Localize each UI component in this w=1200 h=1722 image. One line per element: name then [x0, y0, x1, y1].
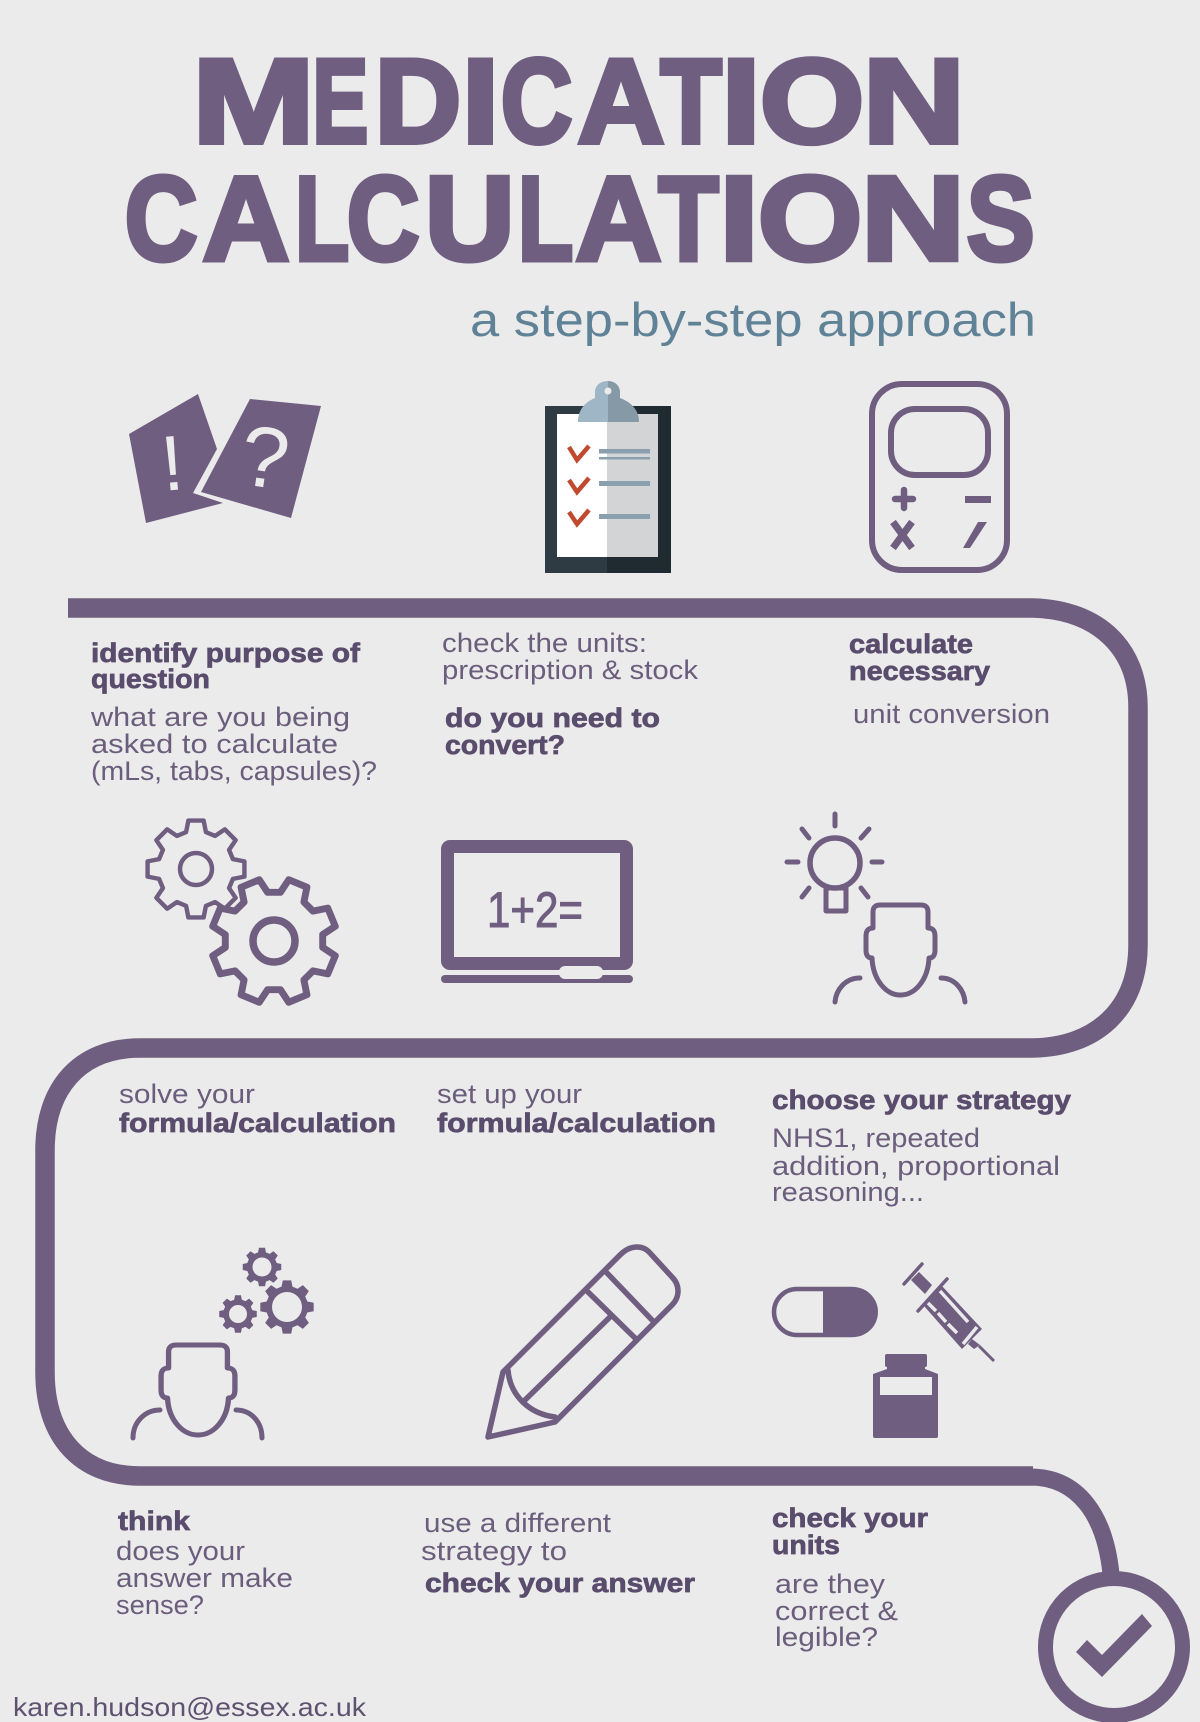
step: calculate necessary: calculate — [849, 629, 973, 659]
title: A — [202, 152, 290, 286]
step: choose strategy: addition, proportional — [772, 1151, 1060, 1181]
step: use a different strategy: strategy to — [421, 1536, 567, 1566]
step: choose strategy — [772, 1085, 1071, 1207]
title — [125, 34, 1035, 286]
step: calculate necessary: necessary — [849, 656, 990, 686]
step: set up: formula/calculation — [437, 1108, 716, 1138]
title: I — [719, 152, 759, 286]
title: U — [425, 152, 515, 286]
icon: person thinking with gears — [133, 1248, 314, 1438]
icon: exclamation and question cards: ? — [234, 407, 295, 509]
title: M — [192, 34, 314, 168]
icon: finish check mark — [1046, 1578, 1182, 1716]
title: A — [576, 152, 662, 286]
step: calculate necessary — [849, 629, 1050, 729]
title: E — [312, 34, 368, 168]
title: I — [462, 34, 499, 168]
icon: exclamation and question cards: ! — [157, 418, 187, 508]
step: use a different strategy: use a different — [424, 1508, 612, 1538]
title: L — [295, 152, 349, 286]
step: identify purpose: identify purpose of — [91, 638, 361, 668]
step: think: answer make — [116, 1563, 293, 1593]
step: calculate necessary: unit conversion — [853, 699, 1050, 729]
title: O — [758, 152, 862, 286]
title: T — [660, 34, 722, 168]
title: D — [375, 34, 461, 168]
subtitle: a step-by-step approach — [470, 293, 1036, 346]
title: O — [760, 34, 864, 168]
step: check your units — [772, 1503, 929, 1652]
step: identify purpose: (mLs, tabs, capsules)? — [91, 756, 377, 786]
step: choose strategy: NHS1, repeated — [772, 1123, 980, 1153]
step: check your units: correct & — [775, 1596, 898, 1626]
step: check the units: do you need to — [445, 703, 660, 733]
icon: medicine bottle — [873, 1354, 938, 1438]
title: N — [861, 152, 965, 286]
step: check your units: units — [772, 1530, 840, 1560]
title: A — [578, 34, 664, 168]
step: identify purpose — [90, 638, 377, 786]
step: check your units: are they — [775, 1569, 886, 1599]
icon: pencil — [488, 1247, 678, 1437]
title: N — [863, 34, 965, 168]
step: check your units: check your — [772, 1503, 929, 1533]
title: C — [125, 152, 198, 286]
title: C — [501, 34, 572, 168]
step: think: sense? — [116, 1590, 204, 1620]
title: C — [347, 152, 420, 286]
step: check the units: convert? — [445, 730, 565, 760]
icon: clipboard — [545, 381, 671, 573]
title: I — [721, 34, 761, 168]
step: solve: solve your — [119, 1079, 255, 1109]
icon: calculator — [872, 384, 1007, 570]
step: identify purpose: question — [91, 664, 210, 694]
step: check the units: check the units: — [442, 628, 647, 658]
step: identify purpose: asked to calculate — [91, 729, 338, 759]
step: think: think — [118, 1506, 191, 1536]
step: set up — [437, 1079, 716, 1138]
title: T — [658, 152, 719, 286]
title: L — [518, 152, 573, 286]
step: set up: set up your — [437, 1079, 582, 1109]
contact email: karen.hudson@essex.ac.uk — [13, 1692, 367, 1722]
step: check the units: prescription & stock — [442, 655, 699, 685]
icon: capsule — [774, 1287, 878, 1337]
step: solve: formula/calculation — [119, 1108, 396, 1138]
icon: syringe — [904, 1264, 994, 1361]
step: choose strategy: reasoning... — [772, 1177, 924, 1207]
step: check your units: legible? — [775, 1622, 878, 1652]
icon: exclamation and question cards — [129, 394, 321, 523]
icon: person with lightbulb — [787, 814, 965, 1002]
step: choose strategy: choose your strategy — [772, 1085, 1071, 1115]
icon: laptop with sum: 1+2= — [487, 882, 583, 938]
icon: gears — [148, 821, 355, 1022]
step: use a different strategy — [421, 1508, 696, 1598]
winding path — [45, 608, 1138, 1574]
step: identify purpose: what are you being — [90, 702, 350, 732]
step: use a different strategy: check your answer — [425, 1568, 696, 1598]
icon: laptop with sum — [441, 840, 633, 983]
title: S — [967, 152, 1035, 286]
step: solve — [119, 1079, 396, 1138]
step: think: does your — [116, 1536, 245, 1566]
step: check the units — [442, 628, 699, 760]
step: think — [116, 1506, 293, 1620]
